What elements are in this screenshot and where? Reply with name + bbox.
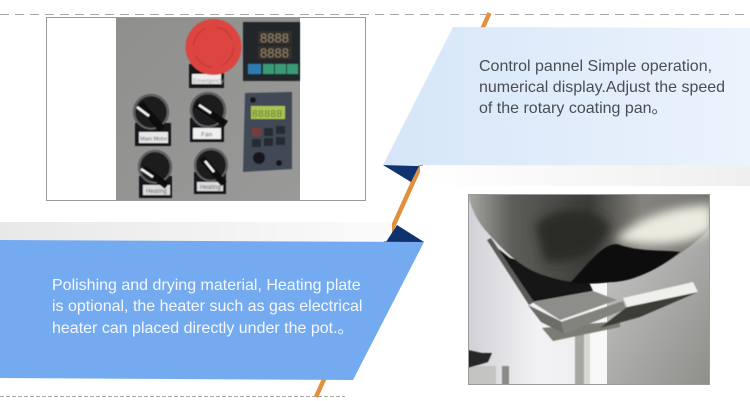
emergency stop button bbox=[186, 19, 242, 75]
tray support bbox=[542, 321, 620, 341]
pan bowl bbox=[468, 194, 710, 283]
control panel text: numerical display.Adjust the speed bbox=[479, 79, 725, 96]
tray front lip bbox=[528, 305, 565, 334]
black lower band bbox=[570, 244, 680, 284]
switch: heating left bbox=[138, 150, 172, 198]
light blue banner bbox=[383, 27, 750, 166]
temperature controller bbox=[243, 22, 300, 81]
bottom dashed divider bbox=[0, 396, 345, 398]
tray back edge bbox=[487, 238, 534, 305]
support post bbox=[575, 332, 590, 385]
tray underside bbox=[498, 248, 594, 302]
grey panel surface bbox=[116, 18, 300, 200]
switch: fan bbox=[190, 92, 226, 142]
panel: control panel description bbox=[383, 27, 750, 166]
photo: control panel bbox=[46, 18, 366, 200]
emergency stop label: Emergency bbox=[193, 79, 223, 85]
blue banner bbox=[0, 240, 424, 380]
heating text: is optional, the heater such as gas electrical bbox=[52, 298, 362, 315]
photo: coating pan and tray bbox=[468, 194, 712, 385]
heating text: Polishing and drying material, Heating plate bbox=[52, 277, 361, 294]
navy fold: lower bbox=[386, 225, 424, 242]
tray floor bbox=[532, 291, 617, 320]
emergency stop label bbox=[189, 64, 224, 88]
photo border bbox=[468, 194, 710, 384]
switch: main motor: Main Motor bbox=[140, 136, 168, 142]
dark reflection bbox=[535, 210, 610, 262]
switch: heating right bbox=[194, 148, 228, 194]
temperature controller: 8888 bbox=[260, 30, 289, 46]
top dashed divider bbox=[0, 14, 750, 16]
temperature controller: 8888 bbox=[260, 46, 289, 60]
inverter keypad: 88888 bbox=[252, 109, 283, 120]
panel: heating description bbox=[0, 240, 424, 380]
switch: heating right: Heating bbox=[200, 185, 221, 191]
tray handle bbox=[623, 282, 698, 307]
control panel text: Control pannel Simple operation, bbox=[479, 58, 712, 75]
back wall bbox=[469, 198, 590, 384]
equipment bottom left bbox=[468, 350, 509, 385]
switch: main motor bbox=[133, 94, 171, 146]
heating text: heater can placed directly under the pot.。 bbox=[52, 320, 354, 337]
inverter keypad bbox=[243, 92, 292, 172]
orange diagonal line bbox=[316, 13, 490, 397]
shadow above blue banner bbox=[0, 222, 392, 241]
bright reflection bbox=[615, 205, 712, 244]
switch: heating left: Heating bbox=[146, 189, 167, 195]
shadow under light blue banner bbox=[420, 166, 750, 186]
navy fold: upper bbox=[383, 165, 419, 182]
control panel text: of the rotary coating pan。 bbox=[479, 100, 668, 117]
switch: fan: Fan bbox=[201, 132, 213, 138]
bowl shading bbox=[535, 205, 712, 284]
tray handle underside bbox=[600, 292, 698, 328]
